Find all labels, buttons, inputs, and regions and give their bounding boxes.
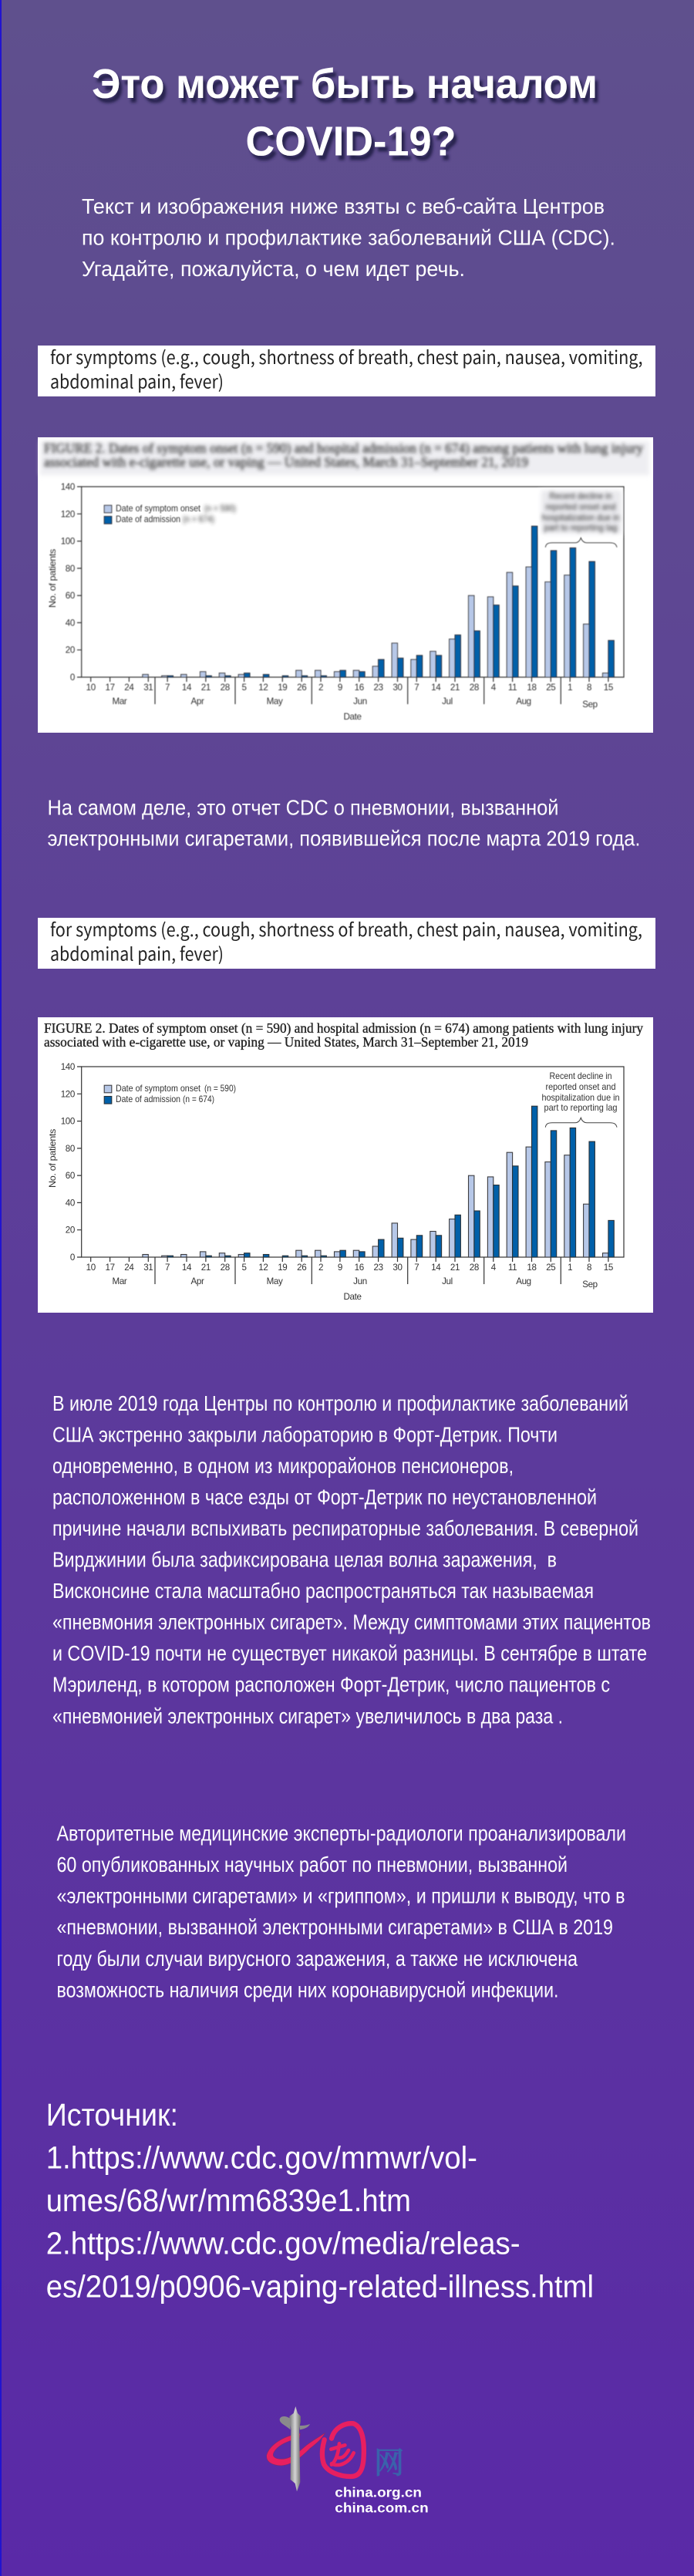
x axis labels: 16 — [355, 1263, 364, 1273]
x axis labels: 23 — [373, 1263, 383, 1273]
panel: chart figure — [38, 1017, 653, 1313]
sources: Источник: — [46, 2097, 178, 2133]
explanation text: электронными сигаретами, появившейся после марта 2019 года. — [48, 827, 640, 851]
x axis labels: 25 — [546, 1263, 555, 1273]
annotation brace — [545, 1118, 617, 1128]
bar chart: blurred version — [47, 482, 624, 722]
y axis labels: 80 — [66, 564, 75, 574]
annotation: hospitalization due in — [541, 1092, 620, 1103]
y axis labels: 140 — [61, 1062, 75, 1072]
y axis labels: 0 — [70, 673, 75, 683]
legend: Date of admission — [116, 1094, 180, 1104]
title: COVID-19? — [245, 119, 456, 165]
x axis labels: 24 — [124, 1263, 134, 1273]
annotation: reported onset and — [546, 1081, 615, 1092]
x axis labels: 10 — [86, 683, 96, 693]
x axis labels: 19 — [278, 683, 287, 693]
legend: (n = 590) — [204, 1083, 236, 1094]
x axis labels: 31 — [143, 683, 153, 693]
x axis labels: Mar — [113, 696, 127, 706]
body text: radiologists — [57, 1822, 626, 2001]
logo urls: china.org.cn — [335, 2485, 422, 2500]
x axis labels: 1 — [568, 1263, 572, 1273]
x axis labels: 24 — [124, 683, 134, 693]
x axis labels: 21 — [201, 1263, 211, 1273]
figure caption: associated with e-cigarette use, or vaping — United States, March 31–September 21, 2019 — [44, 1034, 528, 1050]
blurred annotation: Recent decline in — [549, 491, 612, 501]
x axis labels: 25 — [546, 683, 555, 693]
x axis labels: 7 — [165, 1263, 170, 1273]
sources: 1.https://www.cdc.gov/mmwr/vol- — [46, 2140, 477, 2176]
legend: Date of symptom onset — [116, 1083, 201, 1094]
x axis labels: 8 — [587, 1263, 591, 1273]
x axis labels: 21 — [201, 683, 211, 693]
x axis labels: 30 — [392, 1263, 403, 1273]
x axis labels: 28 — [221, 683, 230, 693]
body text: Fort Detrick: Вирджинии была зафиксирована целая волна заражения, в — [52, 1547, 557, 1572]
excerpt box: symptoms (first): abdominal pain, fever) — [50, 367, 224, 393]
y axis labels: 40 — [66, 1198, 75, 1208]
x axis labels: 14 — [182, 1263, 192, 1273]
legend: Date of symptom onset — [116, 503, 201, 514]
x axis labels: 21 — [450, 1263, 460, 1273]
x axis labels: Mar — [113, 1276, 127, 1286]
y axis title: No. of patients — [47, 1129, 58, 1188]
excerpt box: symptoms (second): abdominal pain, fever) — [50, 939, 224, 966]
figure caption: FIGURE 2. Dates of symptom onset (n = 590) and hospital admission (n = 674) among patients with lung injury — [44, 1020, 643, 1036]
y axis labels: 80 — [66, 1144, 75, 1154]
legend: (n = 674) — [183, 514, 214, 524]
chart axes — [77, 1067, 624, 1284]
y axis labels: 100 — [61, 537, 75, 547]
x axis labels: 15 — [604, 683, 613, 693]
x axis labels: Jul — [442, 696, 453, 706]
x axis labels: 28 — [470, 683, 479, 693]
legend: (n = 674) — [183, 1094, 214, 1104]
y axis labels — [61, 482, 75, 683]
x axis labels: Sep — [582, 700, 598, 710]
x axis labels: May — [267, 1276, 283, 1286]
sources: 2.https://www.cdc.gov/media/releas- — [46, 2226, 520, 2261]
x axis labels — [86, 683, 613, 722]
x axis labels: 28 — [470, 1263, 479, 1273]
x axis labels: 31 — [143, 1263, 153, 1273]
blurred annotation — [541, 491, 622, 534]
x axis labels: 21 — [450, 683, 460, 693]
logo urls — [335, 2485, 429, 2516]
legend — [104, 503, 236, 524]
sources — [46, 2097, 594, 2305]
body text: Fort Detrick: США экстренно закрыли лабораторию в Форт-Детрик. Почти — [52, 1422, 558, 1447]
x axis labels: 17 — [105, 683, 115, 693]
x axis labels: 5 — [242, 1263, 247, 1273]
blurred figure caption — [40, 440, 649, 475]
legend: (n = 590) — [204, 503, 236, 514]
x axis labels: 14 — [182, 683, 192, 693]
y axis labels: 0 — [70, 1253, 75, 1263]
body text: Fort Detrick: «пневмонией электронных сигарет» увеличилось в два раза . — [52, 1704, 563, 1728]
x axis labels: 4 — [491, 683, 497, 693]
title: Это может быть началом — [92, 61, 598, 107]
x axis labels: 30 — [392, 683, 403, 693]
chart axes — [77, 487, 624, 704]
x axis labels: 18 — [527, 683, 537, 693]
body text: radiologists: 60 опубликованных научных работ по пневмонии, вызванной — [57, 1853, 568, 1876]
excerpt box: symptoms (second): for symptoms (e.g., cough, shortness of breath, chest pain, nausea, vomiting, — [50, 915, 642, 942]
x axis labels: 18 — [527, 1263, 537, 1273]
x axis labels: 1 — [568, 683, 572, 693]
x axis labels: 9 — [338, 1263, 342, 1273]
bar chart — [47, 1062, 624, 1302]
legend — [104, 1083, 236, 1104]
y axis labels: 120 — [61, 1089, 75, 1099]
excerpt box: symptoms (second) — [38, 915, 655, 969]
title — [92, 61, 598, 165]
x axis labels: 2 — [318, 683, 323, 693]
annotation: part to reporting lag — [544, 1102, 617, 1113]
body text: radiologists: году были случаи вирусного заражения, а также не исключена — [57, 1947, 578, 1971]
x axis labels: Aug — [516, 696, 531, 706]
y axis title: No. of patients — [47, 549, 58, 608]
x axis labels: 5 — [242, 683, 247, 693]
x axis labels: 23 — [373, 683, 383, 693]
x axis labels: Apr — [191, 696, 204, 706]
x axis labels: Apr — [191, 1276, 204, 1286]
blurred annotation: reported onset and — [546, 501, 615, 512]
x axis labels — [86, 1263, 613, 1302]
intro text: Текст и изображения ниже взяты с веб-сайта Центров — [82, 194, 605, 218]
panel: blurred chart figure — [38, 437, 653, 733]
x axis labels: 17 — [105, 1263, 115, 1273]
x axis labels: Date — [343, 712, 362, 722]
sources: umes/68/wr/mm6839e1.htm — [46, 2183, 411, 2218]
blurred figure caption: associated with e-cigarette use, or vaping — United States, March 31–September 21, 2019 — [44, 454, 528, 470]
x axis labels: 26 — [297, 1263, 306, 1273]
x axis labels: 9 — [338, 683, 342, 693]
y axis labels — [61, 1062, 75, 1263]
intro text: по контролю и профилактике заболеваний США (CDC). — [82, 225, 615, 250]
icon: stone pillar and red emblem — [267, 2406, 364, 2491]
bars — [143, 1106, 614, 1257]
figure caption — [44, 1020, 643, 1050]
intro text — [82, 194, 615, 281]
x axis labels: Jun — [353, 696, 367, 706]
x axis labels: 10 — [86, 1263, 96, 1273]
explanation text: На самом деле, это отчет CDC о пневмонии, вызванной — [48, 796, 558, 820]
x axis labels: 16 — [355, 683, 364, 693]
body text: radiologists: возможность наличия среди них коронавирусной инфекции. — [57, 1978, 558, 2001]
blurred annotation: hospitalization due in — [541, 512, 620, 523]
x axis labels: Jul — [442, 1276, 453, 1286]
body text: Fort Detrick: расположенном в часе езды от Форт-Детрик по неустановленной — [52, 1485, 597, 1509]
y axis labels: 20 — [66, 646, 75, 656]
y axis labels: 60 — [66, 591, 75, 601]
x axis labels: 7 — [165, 683, 170, 693]
x axis labels: 2 — [318, 1263, 323, 1273]
x axis labels: 12 — [258, 1263, 268, 1273]
x axis labels: 7 — [414, 683, 419, 693]
excerpt box: symptoms (first): for symptoms (e.g., cough, shortness of breath, chest pain, nausea, vomiting, — [50, 343, 643, 369]
intro text: Угадайте, пожалуйста, о чем идет речь. — [82, 257, 465, 281]
logo urls: china.com.cn — [335, 2500, 429, 2516]
y axis labels: 100 — [61, 1117, 75, 1127]
bars — [143, 526, 614, 677]
y axis labels: 120 — [61, 509, 75, 519]
x axis labels: 26 — [297, 683, 306, 693]
x axis labels: 15 — [604, 1263, 613, 1273]
y axis labels: 140 — [61, 482, 75, 492]
y axis labels: 20 — [66, 1226, 75, 1236]
blurred figure caption: FIGURE 2. Dates of symptom onset (n = 590) and hospital admission (n = 674) among patients with lung injury — [44, 440, 643, 456]
x axis labels: 11 — [508, 1263, 517, 1273]
sources: es/2019/p0906-vaping-related-illness.html — [46, 2269, 594, 2305]
x axis labels: Date — [343, 1292, 362, 1302]
x axis labels: 14 — [431, 683, 441, 693]
logo: china.org.cn — [267, 2406, 429, 2516]
x axis labels: 19 — [278, 1263, 287, 1273]
x axis labels: 7 — [414, 1263, 419, 1273]
body text: Fort Detrick — [52, 1391, 651, 1728]
y axis labels: 60 — [66, 1171, 75, 1181]
y axis labels: 40 — [66, 618, 75, 628]
x axis labels: 11 — [508, 683, 517, 693]
x axis labels: Sep — [582, 1280, 598, 1290]
annotation brace — [545, 538, 617, 548]
annotation: Recent decline in — [549, 1071, 612, 1081]
x axis labels: Jun — [353, 1276, 367, 1286]
blurred annotation: part to reporting lag — [544, 522, 617, 533]
body text: Fort Detrick: Висконсине стала масштабно распространяться так называемая — [52, 1579, 594, 1603]
explanation text — [48, 796, 640, 851]
x axis labels: 28 — [221, 1263, 230, 1273]
annotation — [541, 1071, 620, 1113]
x axis labels: 8 — [587, 683, 591, 693]
body text: Fort Detrick: одновременно, в одном из микрорайонов пенсионеров, — [52, 1454, 514, 1478]
legend: Date of admission — [116, 514, 180, 524]
x axis labels: Aug — [516, 1276, 531, 1286]
x axis labels: May — [267, 696, 283, 706]
logo character: 网 — [374, 2439, 404, 2483]
excerpt box: symptoms (first) — [38, 343, 655, 396]
x axis labels: 14 — [431, 1263, 441, 1273]
x axis labels: 12 — [258, 683, 268, 693]
x axis labels: 4 — [491, 1263, 497, 1273]
